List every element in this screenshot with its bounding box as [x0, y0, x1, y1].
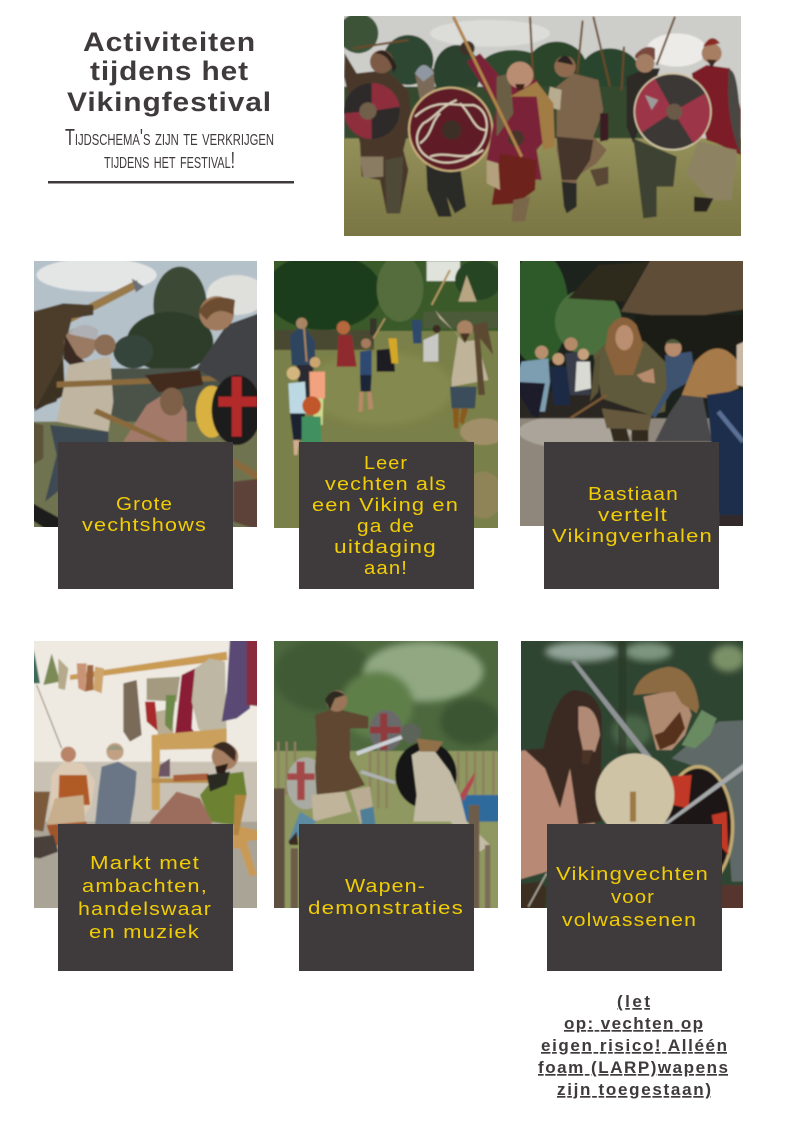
caption box [58, 442, 233, 589]
activity card: Wapen-demonstraties [263, 628, 510, 971]
man 6 [692, 65, 741, 155]
caption [78, 852, 212, 942]
caption: vechtshows [82, 514, 207, 535]
caption: aan! [364, 557, 408, 578]
warning note: op: vechten op [564, 1014, 703, 1033]
caption: volwassenen [562, 909, 697, 930]
caption: een Viking en [312, 494, 459, 515]
caption: Vikingverhalen [552, 525, 713, 546]
caption [308, 875, 464, 918]
caption: Markt met [90, 852, 200, 873]
photo: children practising on the field [274, 261, 498, 528]
caption [552, 483, 713, 546]
caption: Grote [116, 493, 173, 514]
warning note: zijn toegestaan) [557, 1080, 711, 1099]
photo: storyteller with audience [520, 261, 743, 526]
title [67, 27, 272, 117]
caption: handelswaar [78, 898, 212, 919]
caption box [58, 824, 233, 971]
caption: vertelt [598, 504, 668, 525]
subtitle [65, 124, 274, 173]
activity card: Bastiaan vertelt [508, 248, 755, 589]
warning note: (let [617, 992, 650, 1011]
caption box [299, 442, 474, 589]
caption: demonstraties [308, 897, 464, 918]
title underline [48, 181, 294, 184]
man 2 [415, 68, 435, 100]
caption: uitdaging [334, 536, 437, 557]
man 1 [344, 53, 412, 213]
caption: Wapen- [345, 875, 426, 896]
warning note: eigen risico! Alléén [541, 1036, 727, 1055]
caption: Vikingvechten [556, 863, 709, 884]
caption: en muziek [89, 921, 200, 942]
activity card: Vikingvechten voor volwassenen [508, 628, 755, 971]
title: Activiteiten [83, 27, 256, 57]
caption: voor [611, 886, 655, 907]
man 4 [557, 73, 607, 187]
photo: fighting scene [34, 261, 257, 527]
caption: ga de [357, 515, 415, 536]
caption: Bastiaan [588, 483, 679, 504]
caption [312, 452, 459, 578]
subtitle: Tijdschema's zijn te verkrijgen [65, 124, 274, 150]
warning note [538, 992, 728, 1099]
caption: ambachten, [82, 875, 208, 896]
caption box [547, 824, 722, 971]
activity card: Markt [23, 628, 270, 971]
title: tijdens het [90, 56, 249, 86]
man 5 [627, 68, 660, 143]
activity card: Leer vechten [263, 248, 510, 589]
caption: Leer [364, 452, 408, 473]
subtitle: tijdens het festival! [104, 147, 235, 173]
photo: market stall with crafts [34, 641, 257, 908]
caption: vechten als [325, 473, 447, 494]
caption box [299, 824, 474, 971]
caption box [544, 442, 719, 589]
caption [82, 493, 207, 535]
photo: two fighters face to face [521, 641, 743, 908]
man 3 [467, 53, 550, 180]
caption [556, 863, 709, 930]
warning note: foam (LARP)wapens [538, 1058, 728, 1077]
photo: weapon demonstration [274, 641, 498, 908]
activity card: Grote vechtshows [20, 245, 277, 589]
photo: charging vikings [344, 16, 741, 236]
title: Vikingfestival [67, 87, 272, 117]
